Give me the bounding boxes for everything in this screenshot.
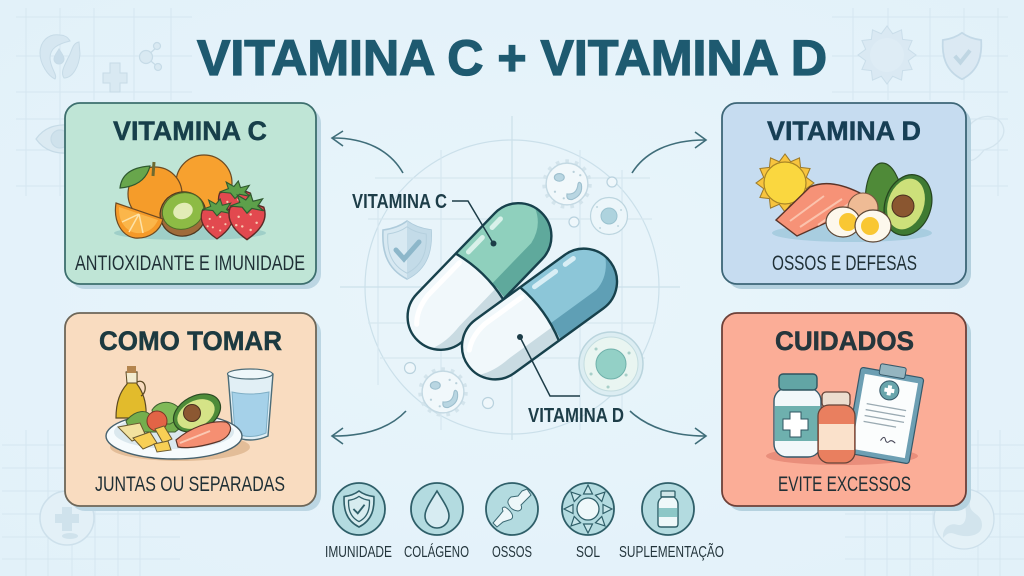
panel: como tomar xyxy=(65,313,321,511)
background icon: hands with drop xyxy=(40,35,80,79)
icon: sol: SOL xyxy=(576,544,600,561)
arrow to cuidados xyxy=(630,411,706,444)
caption: EVITE EXCESSOS xyxy=(778,473,911,496)
panel: cuidados xyxy=(722,313,971,511)
icon row xyxy=(325,483,724,561)
background icon: bone outline xyxy=(968,116,1004,161)
icon: ossos xyxy=(486,483,538,561)
icon: ossos: OSSOS xyxy=(492,544,532,561)
capsule: vitamina D xyxy=(449,236,630,392)
illustration: citrus, kiwi and strawberries xyxy=(114,155,266,243)
background icon: medical cell xyxy=(40,491,94,545)
icon: imunidade: IMUNIDADE xyxy=(325,544,392,561)
heading: VITAMINA D xyxy=(767,116,921,146)
illustration: bottles and clipboard xyxy=(766,360,925,465)
icon: suplementação xyxy=(619,483,724,561)
background icon: sun xyxy=(858,26,916,84)
heading: CUIDADOS xyxy=(775,326,914,356)
illustration: sun, salmon, eggs and avocado xyxy=(756,154,939,242)
panel: vitamina C xyxy=(65,103,321,289)
background icon: share nodes xyxy=(140,42,162,70)
capsule: vitamina C xyxy=(394,190,565,363)
icon: colágeno xyxy=(404,483,469,561)
icon: colágeno: COLÁGENO xyxy=(404,542,469,561)
caption: OSSOS E DEFESAS xyxy=(772,252,917,275)
background icon: plus xyxy=(103,63,127,92)
illustration: meal with oil and water xyxy=(106,366,273,461)
icon: suplementação: SUPLEMENTAÇÃO xyxy=(619,541,724,561)
icon: sol xyxy=(562,483,614,561)
caption: ANTIOXIDANTE E IMUNIDADE xyxy=(75,252,305,275)
caption: JUNTAS OU SEPARADAS xyxy=(95,473,285,496)
central circle backdrop xyxy=(340,116,680,440)
label: vitamina C callout: VITAMINA C xyxy=(352,191,447,213)
arrow to vitamina D xyxy=(632,132,706,173)
arrow to vitamina C xyxy=(332,131,403,173)
panel: vitamina D xyxy=(722,103,971,289)
background icon: eye xyxy=(36,125,72,153)
background icon: stomach xyxy=(934,489,994,549)
icon: pathogen bottom left xyxy=(422,371,464,413)
icon: large cell xyxy=(579,332,643,396)
icon: small cell xyxy=(590,198,628,234)
icon: shield xyxy=(383,221,431,279)
decorative bubbles xyxy=(404,177,617,408)
label: vitamina D callout xyxy=(517,334,624,427)
background icon: shield xyxy=(943,33,981,79)
label: vitamina D callout: VITAMINA D xyxy=(528,405,624,427)
heading: COMO TOMAR xyxy=(99,326,282,356)
icon: pathogen top right xyxy=(546,163,588,205)
heading: VITAMINA C xyxy=(113,116,267,146)
label: vitamina C callout xyxy=(352,191,496,246)
arrow to como tomar xyxy=(332,411,406,444)
icon: imunidade xyxy=(325,483,392,561)
title: VITAMINA C + VITAMINA D xyxy=(197,30,827,86)
